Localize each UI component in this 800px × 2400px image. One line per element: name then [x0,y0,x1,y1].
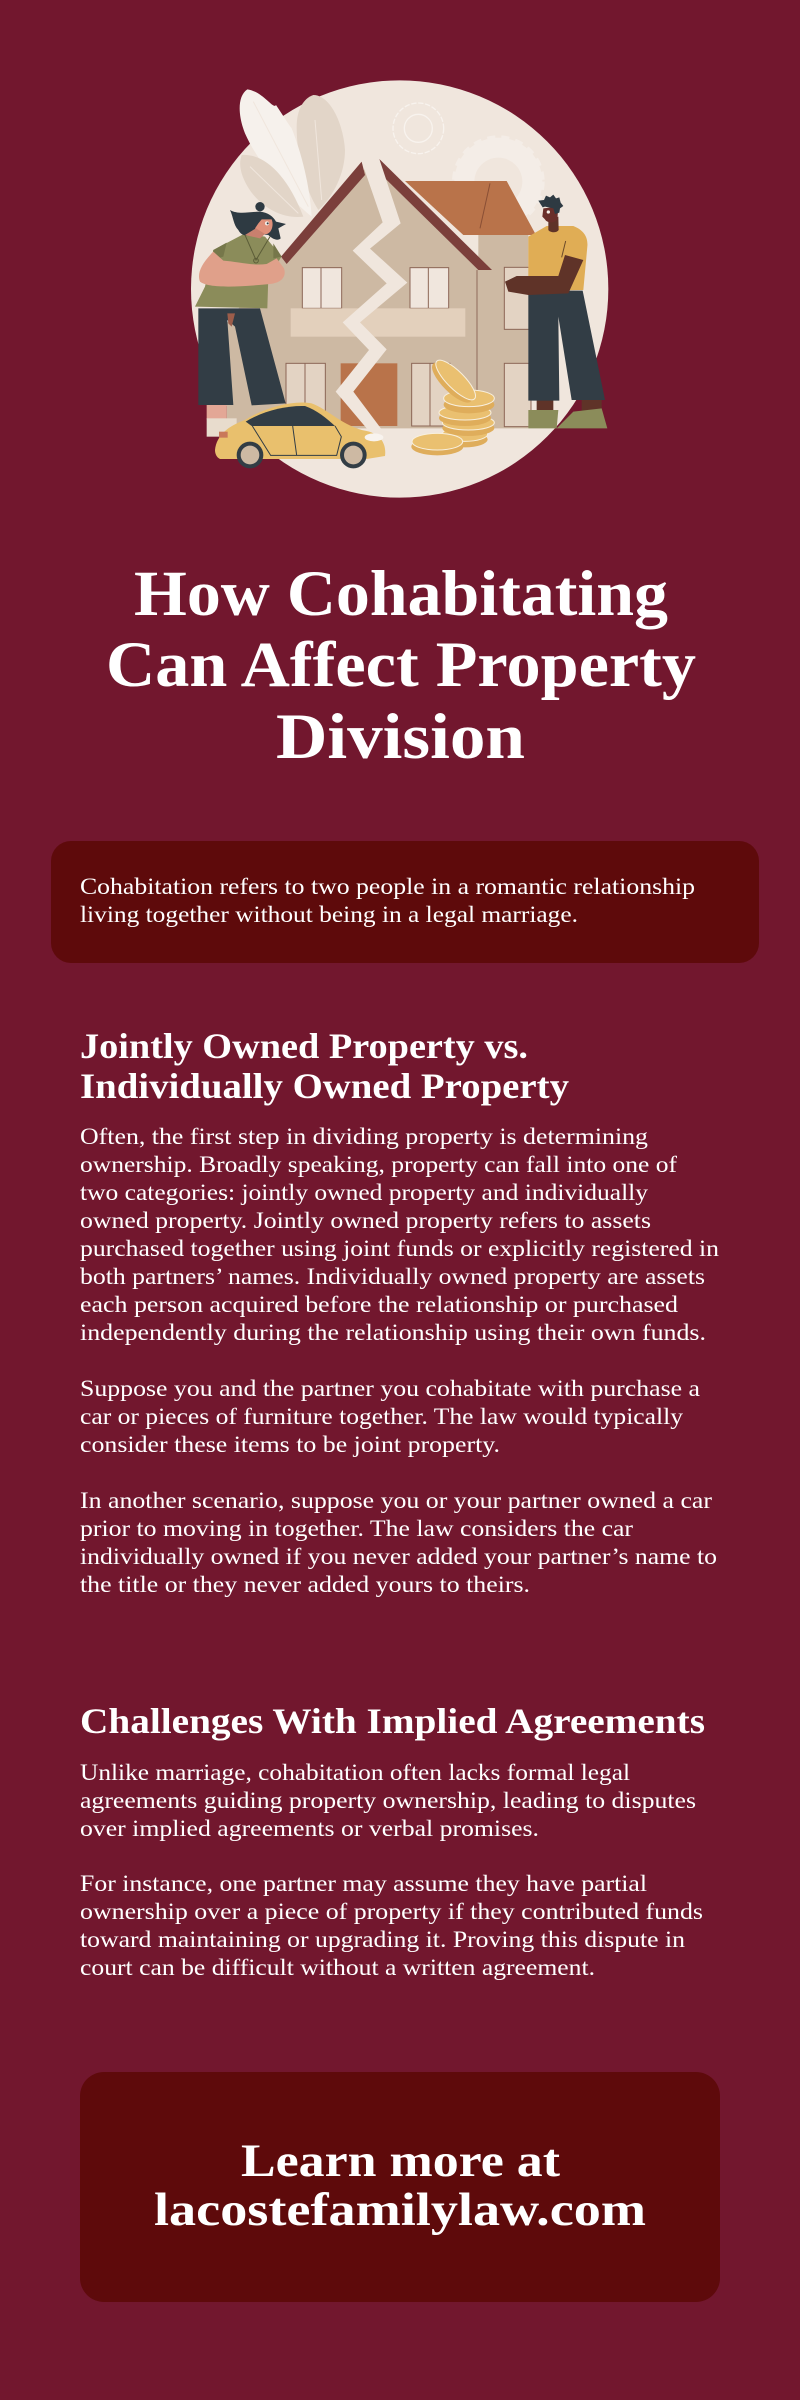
heading: jointly vs individually owned [80,1026,569,1106]
text block: lack of formal agreements: Unlike marriage, cohabitation often lacks formal legal [80,1760,630,1785]
title [106,558,696,773]
left eave [281,162,365,264]
woman shirt [195,233,282,308]
man trousers [528,291,605,401]
text block: ownership paragraph: Often, the first step in dividing property is determining [80,1124,649,1149]
title: Division [276,701,525,773]
intro text: living together without being in a legal marriage. [80,902,578,927]
text block: individual car paragraph: the title or they never added yours to theirs. [80,1572,530,1597]
call to action text [154,2135,646,2236]
right roof [405,181,536,235]
flat coin [411,438,463,455]
text block: partial ownership paragraph [80,1871,703,1980]
text block: ownership paragraph: both partners’ names. Individually owned property are assets [80,1264,705,1289]
text block: joint purchase paragraph: car or pieces of furniture together. The law would typically [80,1404,684,1429]
text block: lack of formal agreements: over implied agreements or verbal promises. [80,1816,539,1841]
text block: ownership paragraph: each person acquired before the relationship or purchased [80,1292,679,1317]
heading: implied agreements: Challenges With Implied Agreements [80,1701,705,1741]
man ankles [537,399,553,411]
man [505,195,607,428]
text block: lack of formal agreements [80,1760,696,1841]
icon: solid gear [454,138,542,226]
text block: individual car paragraph [80,1488,717,1597]
woman arm [199,252,285,287]
heading: jointly vs individually owned: Jointly Owned Property vs. [80,1026,528,1066]
intro text [80,874,695,927]
text block: partial ownership paragraph: ownership over a piece of property if they contributed funds [80,1899,703,1924]
wall divider [475,270,478,428]
text block: partial ownership paragraph: For instance, one partner may assume they have partial [80,1871,647,1896]
illustration: couple splitting a cracked house [191,80,608,498]
text block: joint purchase paragraph [80,1376,700,1457]
text block: individual car paragraph: individually owned if you never added your partner’s name to [80,1544,717,1569]
man shoes [528,410,558,428]
man shirt [528,226,587,291]
woman feet [207,403,227,419]
crack [336,159,407,432]
heading: jointly vs individually owned: Individually Owned Property [80,1066,569,1106]
text block: partial ownership paragraph: toward maintaining or upgrading it. Proving this dispute in [80,1927,686,1952]
text block: ownership paragraph: two categories: jointly owned property and individually [80,1180,649,1205]
house [227,159,536,432]
intro text: Cohabitation refers to two people in a romantic relationship [80,874,695,899]
leaning coin [427,357,477,408]
text block: ownership paragraph [80,1124,720,1345]
coins [411,355,494,455]
woman trousers [198,308,286,405]
woman [195,202,286,437]
text block: ownership paragraph: ownership. Broadly speaking, property can fall into one of [80,1152,677,1177]
text block: joint purchase paragraph: consider these items to be joint property. [80,1432,500,1457]
text block: ownership paragraph: owned property. Jointly owned property refers to assets [80,1208,651,1233]
title: How Cohabitating [134,558,668,630]
car wheels [237,442,263,468]
coin stack [442,431,488,447]
lower windows [286,267,531,427]
woman hair [230,210,286,240]
upper windows [302,268,449,308]
text block: individual car paragraph: In another scenario, suppose you or your partner owned a car [80,1488,712,1513]
man arm [505,255,583,295]
background circle [191,80,608,498]
man neck and face [548,217,559,232]
leaves [240,89,345,217]
text block: individual car paragraph: prior to moving in together. The law considers the car [80,1516,633,1541]
right eave [379,159,492,270]
balcony [291,308,465,337]
panel: intro callout [51,841,759,963]
man hair [538,195,563,214]
text block: lack of formal agreements: agreements guiding property ownership, leading to disputes [80,1788,696,1813]
text block: ownership paragraph: independently during the relationship using their own funds. [80,1320,706,1345]
title: Can Affect Property [106,629,696,701]
text block: partial ownership paragraph: court can be difficult without a written agreement. [80,1955,595,1980]
call to action text: Learn more at [241,2135,560,2187]
woman necklace [245,235,270,260]
text block: joint purchase paragraph: Suppose you and the partner you cohabitate with purchase a [80,1376,700,1401]
text block: ownership paragraph: purchased together using joint funds or explicitly registered in [80,1236,720,1261]
icon: outline gear [393,103,444,154]
door [341,363,397,426]
woman face [255,219,273,234]
car [215,403,385,468]
house walls [227,163,528,428]
panel: call to action [80,2072,720,2302]
call to action text: lacostefamilylaw.com [154,2184,646,2236]
